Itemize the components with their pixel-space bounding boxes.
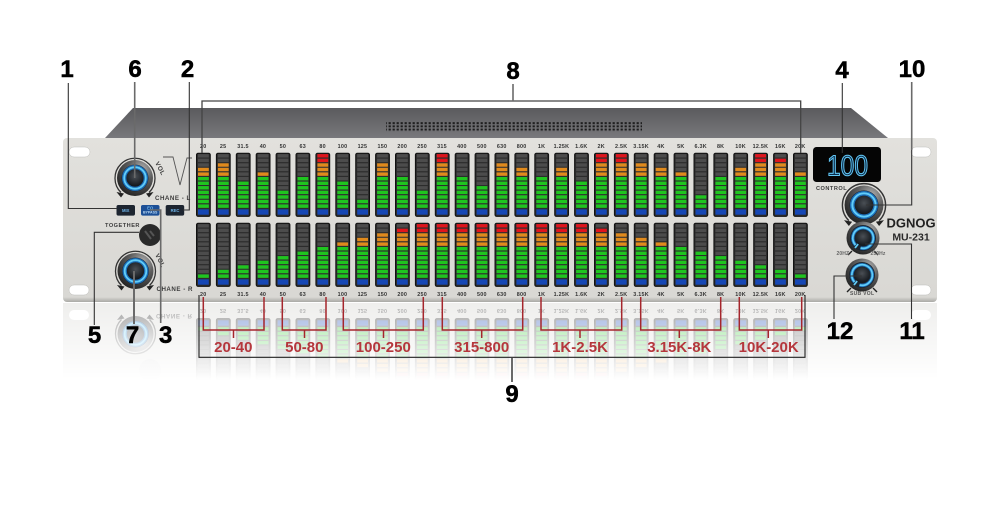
frequency labels: top row: 12.5K [753,144,768,150]
reflection of the unit: CHANE - R [156,312,192,319]
frequency labels: top row: 1.25K [554,144,569,150]
level meters and labels: bottom row: 16K [775,292,786,298]
frequency labels: top row: 100 [338,144,347,150]
level meters and labels: bottom row: 2.5K [615,292,627,298]
button: EQ BYPASS [141,205,160,216]
level meters and labels: bottom row: 80 [319,292,326,298]
level meters and labels: bottom row: 31.5 [237,292,249,298]
control knob [842,184,886,226]
level meters and labels: bottom row: 100 [338,292,347,298]
band bracket 20-40: 20-40 [214,339,252,356]
SUB VOL label: SUB VOL [850,291,874,297]
frequency labels: top row: 20 [200,144,206,150]
frequency labels: top row: 800 [517,144,527,150]
frequency labels: top row: 31.5 [237,144,249,150]
level meters and labels: bottom row: 125 [358,292,367,298]
callout 1 [60,56,117,208]
left channel volume knob [115,158,166,198]
level meters and labels: bottom row: 1K [538,292,545,298]
frequency labels: top row: 6.3K [695,144,707,150]
callout 12: 12 [827,318,853,345]
level meters and labels: bottom row: 1.6K [575,292,588,298]
level meters and labels: bottom row: 12.5K [753,292,768,298]
level meters and labels: bottom row: 800 [517,292,527,298]
function buttons [116,205,184,216]
frequency labels: top row: 5K [677,144,685,150]
callout 7 [126,271,139,349]
VOL label, right channel: VOL [153,253,166,269]
top lid of the chassis [105,108,888,138]
callout 4: 4 [835,57,849,84]
frequency labels: top row: 1.6K [575,144,588,150]
rack hole: bottom left [69,285,89,295]
display reading: 100 [827,150,868,182]
frequency labels: top row: 80 [319,144,326,150]
callout 8: top bracket [202,58,801,153]
button: EQ BYPASS: EQ [147,206,154,210]
button: EQ BYPASS: BYPASS [143,211,158,215]
frequency labels: top row: 63 [300,144,306,150]
callout 6 [128,56,142,178]
band bracket 3.15K-8K: 3.15K-8K [647,339,712,356]
band bracket 50-80 [282,297,326,356]
20HZ label: 20HZ [836,251,849,257]
callout 11: 11 [899,318,925,345]
level meters and labels: bottom row: 6.3K [695,292,707,298]
level meters and labels: bottom row: 400 [457,292,467,298]
frequency labels: top row: 250 [417,144,427,150]
level meters and labels: bottom row: 630 [497,292,507,298]
frequency labels: top row: 315 [437,144,447,150]
level meters and labels: bottom row: 315 [437,292,447,298]
LED display [813,147,881,182]
level meters and labels: bottom row: 50 [280,292,286,298]
band bracket 100-250: 100-250 [356,339,411,356]
frequency labels: top row: 8K [717,144,724,150]
level meters and labels: bottom row: 25 [220,292,226,298]
frequency labels: top row [200,144,806,150]
level meters and labels: bottom row: 250 [417,292,427,298]
frequency labels: top row: 400 [457,144,467,150]
callout 3 [150,210,172,349]
callout 3: 3 [159,322,172,349]
reflection of the unit [63,303,937,373]
band bracket 315-800: 315-800 [454,339,509,356]
button: MIX: MIX [122,208,130,213]
model number: MU-231 [892,232,930,244]
frequency labels: top row: 20K [795,144,806,150]
frequency knob [846,222,880,255]
level meters and labels: bottom row: 20K [795,292,806,298]
callout 9: bottom bracket: 9 [505,381,519,408]
right channel volume knob [116,251,166,290]
frequency labels: top row: 50 [280,144,286,150]
rack hole: top right [911,147,931,157]
callout 5: 5 [88,322,101,349]
frequency labels: top row: 200 [397,144,407,150]
frequency labels: top row: 2K [598,144,605,150]
EQ curve logo [163,157,192,185]
callout 5 [88,232,139,349]
callout 9: bottom bracket [199,295,805,408]
band bracket 10K-20K: 10K-20K [739,339,799,356]
callout 4 [835,57,849,153]
level meters and labels: bottom row: 500 [477,292,487,298]
front panel [63,138,937,302]
band bracket 20-40 [203,297,264,356]
frequency labels: top row: 10K [735,144,746,150]
CHANE - L label: CHANE - L [155,195,191,202]
callout 2: 2 [181,56,194,83]
level meters and labels: bottom row: 8K [717,292,724,298]
band bracket 3.15K-8K [641,297,721,356]
level meters and labels: bottom row: 63 [300,292,306,298]
band bracket 1K-2.5K: 1K-2.5K [552,339,608,356]
together link knob [139,224,161,246]
level meters: top row [196,153,807,216]
vent slots [386,122,642,132]
level meters and labels: bottom row: 200 [397,292,407,298]
callout 6: 6 [128,56,142,83]
frequency labels: top row: 150 [377,144,387,150]
callout 10: 10 [899,56,925,83]
level meters and labels: bottom row: 2K [598,292,605,298]
250Hz label: 250Hz [870,251,886,257]
level meters and labels: bottom row: 5K [677,292,685,298]
frequency labels: top row: 16K [775,144,786,150]
frequency labels: top row: 3.15K [633,144,649,150]
callout 8: top bracket: 8 [506,58,520,85]
frequency labels: top row: 1K [538,144,545,150]
CHANE - R label: CHANE - R [156,286,193,293]
callout 12 [827,276,862,345]
callout 1: 1 [60,56,74,83]
callout 11 [865,244,925,345]
callout 7: 7 [126,322,139,349]
frequency labels: top row: 2.5K [615,144,627,150]
callout 10 [866,56,925,205]
band bracket 10K-20K [739,297,802,356]
level meters and labels: bottom row: 20 [200,292,206,298]
rack hole: top left [69,147,90,157]
band bracket 100-250 [343,297,423,356]
band bracket 1K-2.5K [541,297,622,356]
band bracket 50-80: 50-80 [285,339,323,356]
callout 2 [181,56,194,210]
CONTROL label: CONTROL [816,186,847,192]
frequency labels: top row: 125 [358,144,367,150]
TOGETHER label: TOGETHER [105,223,140,229]
sub volume knob [846,258,878,292]
level meters and labels: bottom row [196,223,807,298]
level meters and labels: bottom row: 4K [657,292,665,298]
level meters and labels: bottom row: 1.25K [554,292,569,298]
frequency labels: top row: 25 [220,144,226,150]
frequency labels: top row: 4K [657,144,665,150]
band bracket 315-800 [442,297,523,356]
level meters and labels: bottom row: 150 [377,292,387,298]
frequency labels: top row: 40 [260,144,266,150]
level meters and labels: bottom row: 3.15K [633,292,649,298]
rack hole: bottom right [911,285,931,295]
button: REC: REC [171,208,179,213]
brand name: DGNOG [886,216,936,230]
VOL label, left channel: VOL [153,161,166,177]
level meters and labels: bottom row: 10K [735,292,746,298]
level meters and labels: bottom row: 40 [260,292,266,298]
frequency labels: top row: 500 [477,144,487,150]
frequency labels: top row: 630 [497,144,507,150]
